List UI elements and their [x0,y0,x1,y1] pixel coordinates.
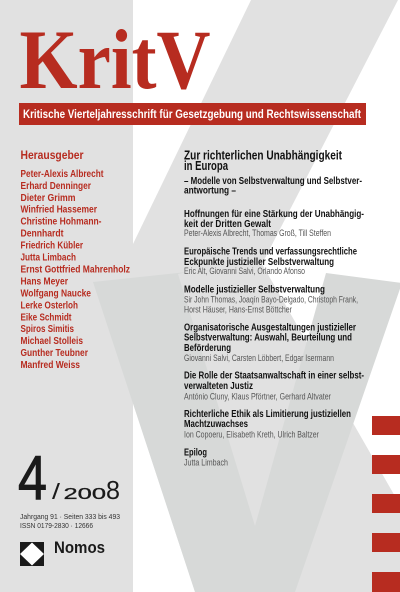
text block: volume and ISSN [20,512,120,530]
panel: editors list: Hans Meyer [20,276,68,287]
contents entry: Hoffnungen: keit der Dritten Gewalt [184,219,271,230]
contents entry: Organisatorische: Selbstverwaltung: Auswahl, Beurteilung und [184,333,352,344]
panel: editors list: Ernst Gottfried Mahrenholz [20,264,130,276]
heading: main topic [184,148,343,173]
heading: Herausgeber: Herausgeber [20,150,84,162]
contents entry: Europäische Trends: Eckpunkte justizieller Selbstverwaltung [184,257,334,268]
contents entry: Hoffnungen [184,209,364,238]
contents entry: Organisatorische [184,323,356,363]
contents entry: Die Rolle [184,371,364,401]
red stripes at right edge [372,416,400,592]
panel: editors list [20,150,130,371]
contents entry: Organisatorische: Beförderung [184,343,231,354]
contents entry: Die Rolle: verwalteten Justiz [184,381,253,392]
issue number: 4/2008: / [52,479,61,504]
issue number: 4/2008: 8 [106,475,120,505]
contents entry: Richterliche Ethik [184,409,351,439]
panel: left grey column [0,0,133,592]
subheading: topic subtitle: antwortung – [184,185,236,196]
contents entry: Modelle [184,284,358,315]
panel: editors list: Peter-Alexis Albrecht [20,169,104,180]
contents entry: Epilog [184,448,228,467]
issue number: 4/2008 [18,444,120,513]
heading: main topic: in Europa [184,159,229,173]
panel: editors list: Dennhardt [20,229,64,240]
panel: editors list: Michael Stolleis [20,336,83,347]
text block: volume and ISSN: ISSN 0179-2830 · 12666 [20,521,93,530]
panel: editors list: Lerke Osterloh [20,300,78,311]
panel: editors list: Manfred Weiss [20,360,80,371]
panel: editors list: Eike Schmidt [20,312,72,323]
contents entry: Europäische Trends [184,246,357,276]
background letter K in light grey [133,0,400,592]
panel: editors list: Christine Hohmann- [20,217,102,228]
panel: editors list: Dieter Grimm [20,193,76,204]
panel: editors list: Jutta Limbach [20,252,76,264]
contents entry: Europäische Trends: Eric Alt, Giovanni Salvi, Orlando Afonso [184,266,305,276]
title: KritV: KritV [20,13,210,107]
contents entry: Hoffnungen: Peter-Alexis Albrecht, Thomas Groß, Till Steffen [184,228,331,238]
background letter V in darker grey [93,272,400,592]
contents entry: Richterliche Ethik: Machtzuwachses [184,419,248,430]
contents entry: Organisatorische: Giovanni Salvi, Carsten Löbbert, Edgar Isermann [184,353,334,363]
issue number: 4/2008: 4 [18,444,47,513]
panel: editors list: Wolfgang Naucke [20,288,91,299]
banner: journal subtitle [19,103,366,125]
contents entry: Modelle: Horst Häuser, Hans-Ernst Böttcher [184,305,292,315]
contents entry: Richterliche Ethik: Richterliche Ethik als Limitierung justiziellen [184,409,351,420]
text block: volume and ISSN: Jahrgang 91 · Seiten 333 bis 493 [20,512,120,521]
panel: editors list: Erhard Denninger [20,181,91,192]
publisher name: Nomos: Nomos [54,539,105,557]
panel: editors list: Gunther Teubner [20,348,88,359]
panel: editors list: Winfried Hassemer [20,205,97,216]
panel: editors list: Friedrich Kübler [20,241,83,252]
panel: editors list: Spiros Simitis [20,324,74,335]
icon: Nomos logo [20,542,44,566]
subheading: topic subtitle [184,176,362,196]
issue number: 4/2008: 200 [64,486,106,503]
contents entry: Die Rolle: António Cluny, Klaus Pförtner, Gerhard Altvater [184,391,331,401]
contents entry: Richterliche Ethik: Ion Copoeru, Elisabeth Kreth, Ulrich Baltzer [184,429,319,439]
contents entry: Modelle: Modelle justizieller Selbstverwaltung [184,284,325,296]
contents entry: Epilog: Jutta Limbach [184,457,228,467]
contents entry: Epilog: Epilog [184,448,207,459]
heading: main topic: Zur richterlichen Unabhängigkeit [184,148,343,162]
